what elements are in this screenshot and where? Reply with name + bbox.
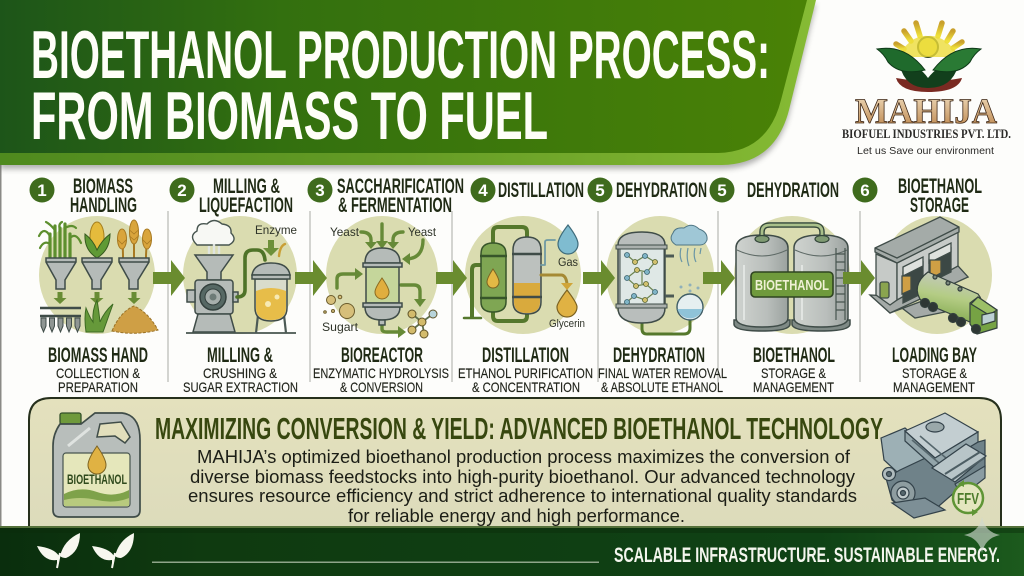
icon: piping xyxy=(464,227,527,321)
column 5 repeat labels xyxy=(753,344,835,395)
icon: FFV badge xyxy=(953,480,983,516)
step 4 heading: 4 xyxy=(478,181,488,200)
icon: FFV badge: FFV xyxy=(957,491,979,508)
icon: outlet stubs xyxy=(665,256,674,296)
step 1 heading: BIOMASS xyxy=(73,175,133,198)
step 5 heading: DEHYDRATION xyxy=(616,179,707,202)
icon: sugarcane xyxy=(39,222,81,257)
title: FROM BIOMASS TO FUEL xyxy=(31,78,548,154)
yeast labels xyxy=(330,225,437,239)
column 4 labels: DISTILLATION xyxy=(482,344,569,367)
step 5 heading xyxy=(588,178,707,202)
column 3 labels xyxy=(313,344,449,395)
column 3 labels: BIOREACTOR xyxy=(341,344,423,367)
icon: steam cloud xyxy=(192,220,234,245)
icon: bioethanol jug xyxy=(53,413,140,517)
icon: grinder xyxy=(186,255,296,333)
column 5 repeat labels: BIOETHANOL xyxy=(753,344,835,367)
column 3 labels: & CONVERSION xyxy=(340,379,423,395)
background discs xyxy=(39,216,992,334)
step 5 heading: 5 xyxy=(595,181,605,200)
column 1 labels xyxy=(48,344,148,395)
panel body text: ensures resource efficiency and strict adherence to international quality standards xyxy=(188,485,857,506)
icon: right tank xyxy=(794,235,848,327)
column 1 labels: BIOMASS HAND xyxy=(48,344,148,367)
step 1 heading: 1 xyxy=(37,181,47,200)
icon: tanker truck xyxy=(917,272,997,334)
icon: sparkle xyxy=(964,517,1000,553)
icon: outlet pipe xyxy=(642,321,690,334)
icon: engine xyxy=(881,413,986,518)
step 4 heading xyxy=(470,178,584,202)
icon: connecting pipe xyxy=(237,250,265,297)
column 4 labels xyxy=(458,344,593,395)
step 6 heading: STORAGE xyxy=(910,194,969,217)
column 4 labels: & CONCENTRATION xyxy=(472,379,580,395)
icon: flask xyxy=(677,284,703,320)
step 2 heading xyxy=(170,175,293,217)
footer bar xyxy=(0,517,1024,576)
step 5 repeat heading: 5 xyxy=(717,181,727,200)
column 4 labels: ETHANOL PURIFICATION xyxy=(458,365,593,381)
column dividers xyxy=(168,211,860,382)
column 5 labels: FINAL WATER REMOVAL xyxy=(598,365,727,381)
step 3 heading: 3 xyxy=(315,181,325,200)
icon: wood chip pile xyxy=(112,306,158,333)
icon: tank tops xyxy=(737,250,847,256)
step 6 heading: 6 xyxy=(860,181,870,200)
tank label: BIOETHANOL xyxy=(755,277,829,294)
column 1 labels: PREPARATION xyxy=(58,379,138,395)
icon: reactor vessel xyxy=(363,248,402,325)
step 3 heading xyxy=(308,175,464,217)
step 3 heading: SACCHARIFICATION xyxy=(337,175,464,198)
column 5 repeat labels: MANAGEMENT xyxy=(753,379,834,395)
yeast labels: Yeast xyxy=(408,225,437,239)
enzyme label: Enzyme xyxy=(255,223,297,237)
icon: molecule xyxy=(408,310,437,338)
step 2 heading: LIQUEFACTION xyxy=(199,194,293,217)
icon: wheat xyxy=(118,220,152,257)
column 6 labels xyxy=(892,344,977,395)
column 2 labels: CRUSHING & xyxy=(203,365,278,381)
column 2 labels: MILLING & xyxy=(207,344,273,367)
panel body text xyxy=(188,446,857,526)
icon: warehouse xyxy=(870,217,968,318)
icon: leaf sprout right xyxy=(92,533,134,568)
column 2 labels: SUGAR EXTRACTION xyxy=(183,379,298,395)
icon: storage tanks xyxy=(734,225,850,331)
icon: input arrows xyxy=(337,224,423,332)
step 3 heading: & FERMENTATION xyxy=(338,194,452,217)
icon: loading bay with tanker xyxy=(870,217,997,334)
glycerin label: Glycerin xyxy=(549,318,585,330)
icon: bioethanol jug: BIOETHANOL xyxy=(67,471,127,487)
step 1 heading: HANDLING xyxy=(70,194,137,217)
icon: corn xyxy=(85,222,110,258)
icon: dehydration column xyxy=(616,225,707,334)
step 6 heading xyxy=(852,175,982,217)
panel body text: diverse biomass feedstocks into high-purity bioethanol. Our advanced technology xyxy=(190,466,856,487)
icon: distillation columns xyxy=(464,225,585,330)
icon: outlets xyxy=(541,240,573,290)
icon: rain cloud xyxy=(671,225,707,266)
panel body text: MAHIJA’s optimized bioethanol production process maximizes the conversion of xyxy=(197,446,851,467)
icon: arrow heads xyxy=(355,241,426,338)
step 1 heading xyxy=(30,175,137,217)
icon: milling and liquefaction xyxy=(186,220,297,333)
column 2 labels xyxy=(183,344,298,395)
icon: hoppers xyxy=(46,258,149,289)
icon: liquefaction tank xyxy=(252,263,290,333)
step 5 repeat heading xyxy=(710,178,839,202)
title xyxy=(31,17,770,154)
step 2 heading: MILLING & xyxy=(213,175,280,198)
column 1 labels: COLLECTION & xyxy=(56,365,141,381)
icon: biomass feedstocks xyxy=(39,220,158,333)
icon: bioreactor xyxy=(322,224,437,338)
column 6 labels: STORAGE & xyxy=(902,365,968,381)
column 5 labels xyxy=(598,344,727,395)
icon: grass xyxy=(85,300,113,332)
logo: Mahija xyxy=(842,19,1011,157)
logo tagline: Let us Save our environment xyxy=(857,145,994,157)
icon: ladder xyxy=(836,248,845,320)
icon: gray column xyxy=(512,237,542,314)
panel body text: for reliable energy and high performance. xyxy=(348,505,685,526)
icon: harvester comb xyxy=(40,308,81,332)
icon: sugar blobs xyxy=(324,295,354,318)
icon: leaf sprout left xyxy=(37,533,80,568)
step 2 heading: 2 xyxy=(177,181,187,200)
sugar label: Sugart xyxy=(322,320,359,334)
icon: yellow drop xyxy=(557,290,577,317)
step 4 heading: DISTILLATION xyxy=(498,179,584,202)
footer rule xyxy=(152,562,599,563)
icon: small down arrows xyxy=(54,292,140,304)
icon: sun rays xyxy=(896,19,962,49)
step 5 repeat heading: DEHYDRATION xyxy=(747,179,839,202)
logo name: MAHIJA xyxy=(855,91,997,131)
icon: left tank xyxy=(736,235,788,327)
icon: tank bases xyxy=(734,320,850,331)
gas label: Gas xyxy=(558,255,578,269)
icon: blue drop xyxy=(558,225,578,254)
icon: green column xyxy=(480,243,507,312)
header banner xyxy=(0,0,816,169)
icon: enzyme arrow xyxy=(263,240,279,256)
column 3 labels: ENZYMATIC HYDROLYSIS xyxy=(313,365,449,381)
column 5 labels: DEHYDRATION xyxy=(613,344,705,367)
column 6 labels: MANAGEMENT xyxy=(893,379,975,395)
icon: connecting pipe xyxy=(755,225,829,242)
icon: vessel xyxy=(616,232,667,323)
column 5 labels: & ABSOLUTE ETHANOL xyxy=(601,379,723,395)
yeast labels: Yeast xyxy=(330,225,360,239)
process arrows xyxy=(153,260,875,296)
column 5 repeat labels: STORAGE & xyxy=(761,365,827,381)
panel: advanced technology xyxy=(29,398,1001,530)
